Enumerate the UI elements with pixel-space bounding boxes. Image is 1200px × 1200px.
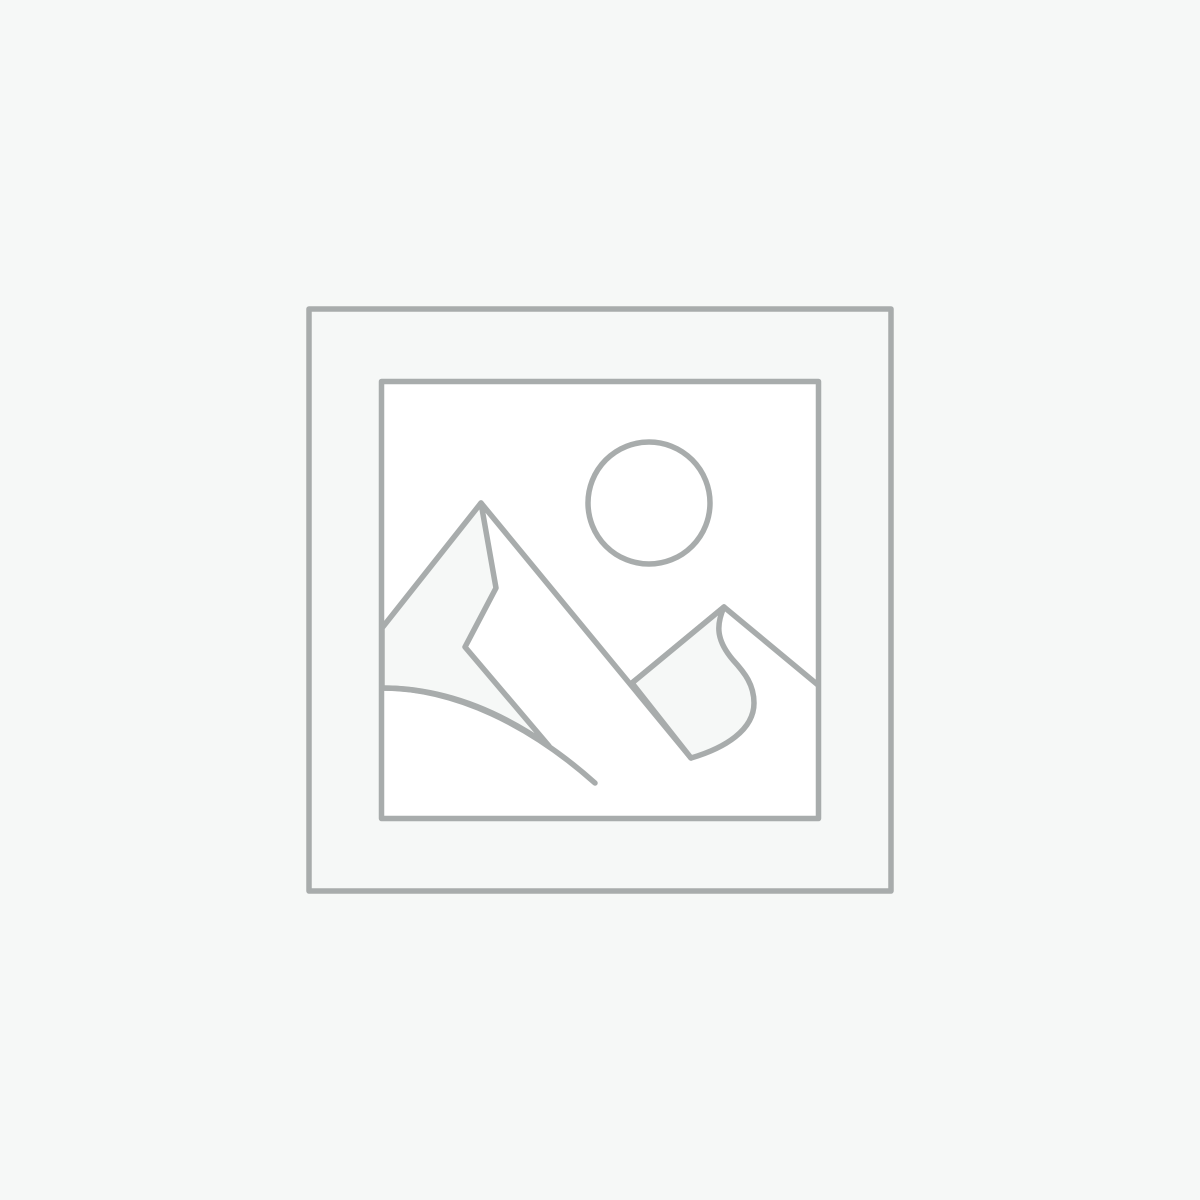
left mountain shaded face <box>382 503 549 746</box>
left mountain ridge <box>481 503 691 758</box>
icon: sun <box>588 442 710 564</box>
right mountain <box>632 607 818 685</box>
foreground hill <box>382 688 595 783</box>
right mountain shaded face <box>632 607 754 758</box>
outer frame <box>309 309 891 891</box>
inner picture panel <box>382 382 818 818</box>
